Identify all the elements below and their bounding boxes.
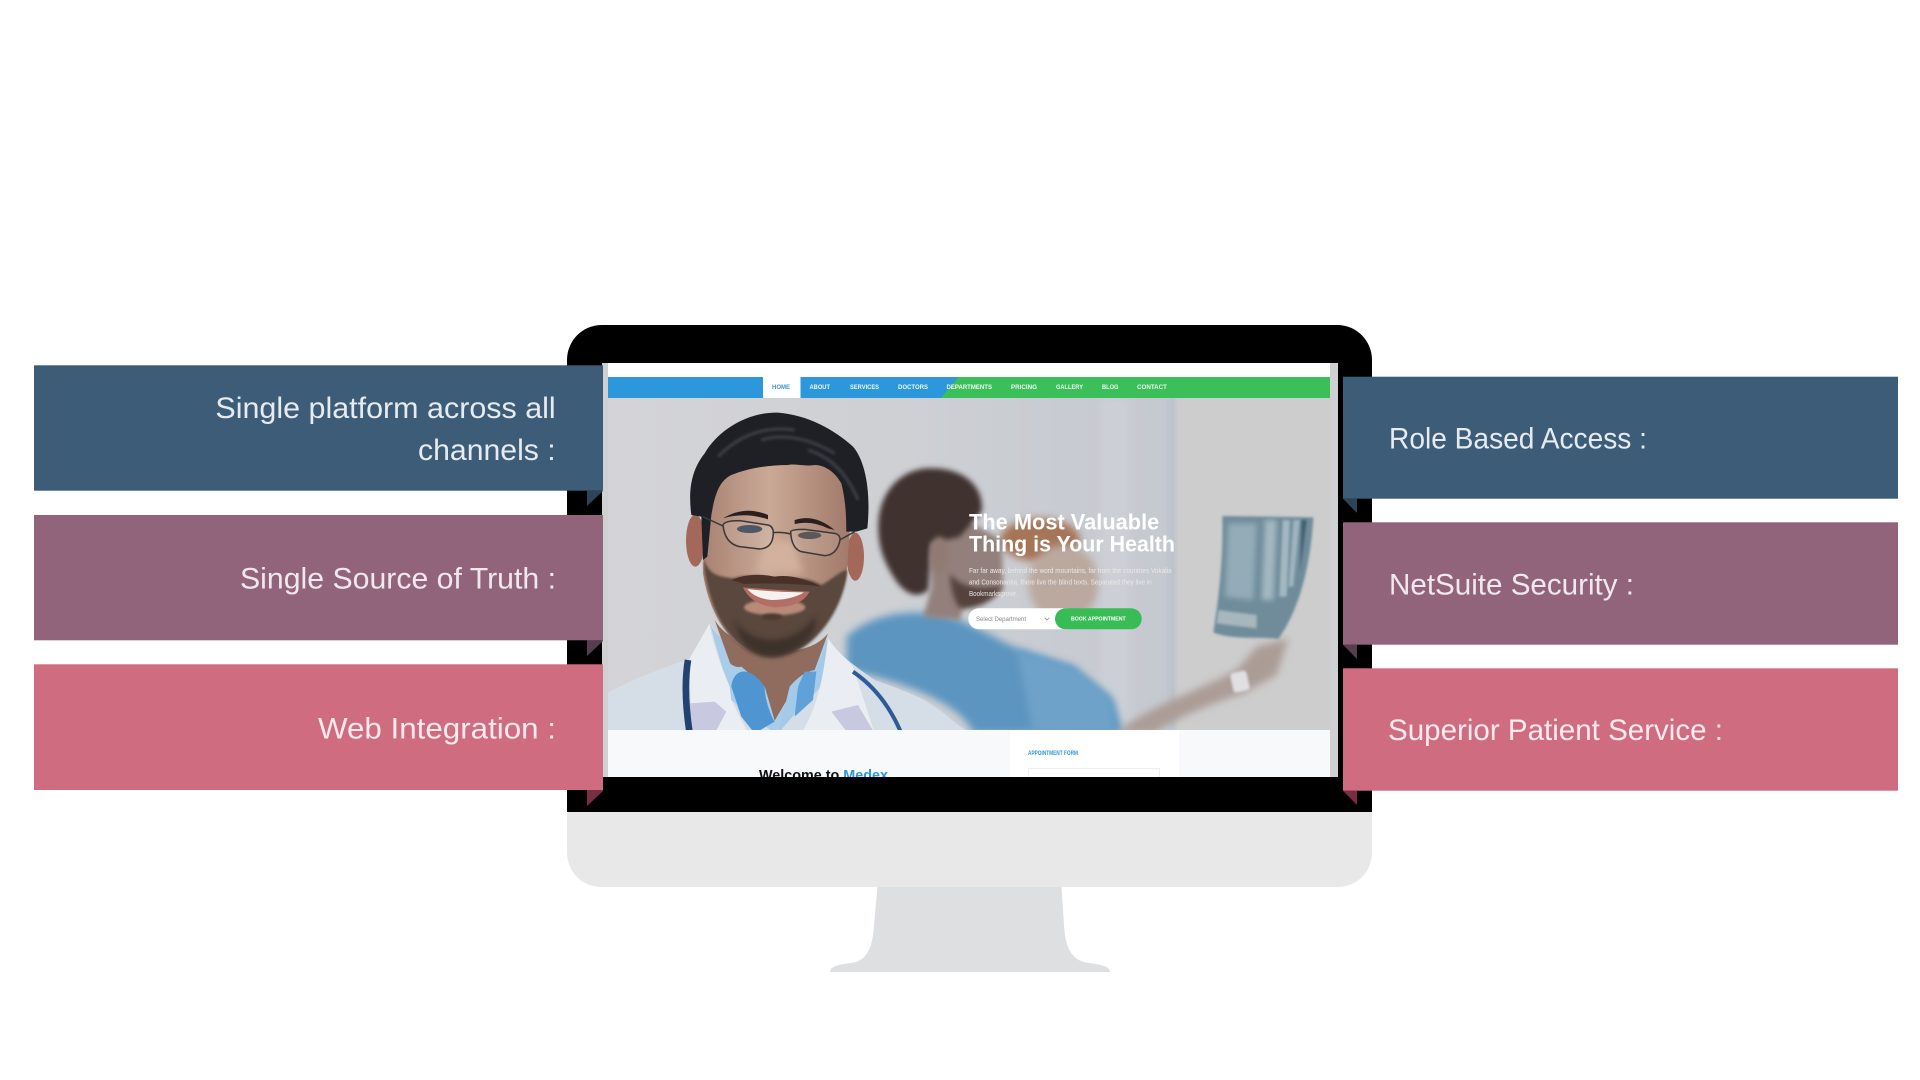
navigation bar: SERVICES [850, 384, 879, 391]
doctor [601, 413, 975, 733]
monitor screen: website [601, 363, 1338, 784]
coat [601, 623, 975, 733]
lower lip area [744, 599, 805, 615]
navigation bar: DEPARTMENTS [946, 384, 992, 391]
hero photo [601, 398, 1330, 733]
hair [690, 413, 868, 560]
hero paragraph: and Consonantia, there live the blind texts. Separated they live in [969, 578, 1152, 587]
hero heading: The Most Valuable [969, 509, 1159, 534]
glasses [703, 517, 855, 556]
hero paragraph: Far far away, behind the word mountains, far from the countries Vokalia [969, 566, 1172, 575]
ribbon: single platform across all channels: channels : [418, 434, 556, 467]
shirt [710, 623, 828, 733]
second person's neck and face [923, 517, 1003, 620]
x-ray film [1213, 516, 1313, 639]
nose [756, 540, 803, 573]
navigation bar: DOCTORS [898, 384, 928, 391]
ribbon: superior patient service: Superior Patient Service : [1388, 714, 1723, 747]
navigation bar [608, 377, 1330, 398]
lower website section [608, 730, 1330, 777]
ribbon: role based access [1343, 377, 1898, 513]
navigation bar: HOME [772, 384, 790, 391]
navigation bar: PRICING [1011, 384, 1037, 391]
mouth [743, 587, 810, 607]
arm [1117, 638, 1288, 733]
appointment form card: APPOINTMENT FORM [1028, 750, 1078, 757]
ribbon: netsuite security [1343, 522, 1898, 659]
ribbon: web integration [34, 664, 603, 806]
mustache [731, 575, 821, 587]
navigation bar: BLOG [1102, 384, 1119, 391]
monitor chin [567, 812, 1372, 887]
stethoscope [686, 660, 690, 733]
book appointment button: BOOK APPOINTMENT [1071, 617, 1126, 623]
department select [968, 608, 1078, 629]
second person's body [847, 613, 1123, 733]
monitor bezel [567, 325, 1372, 812]
department select: Select Department [976, 616, 1026, 623]
shirt collar [730, 664, 774, 730]
second person's hair [878, 468, 982, 595]
beard [703, 557, 847, 657]
ribbon: single platform across all channels [34, 365, 603, 506]
ribbon: netsuite security: NetSuite Security : [1389, 568, 1634, 601]
ribbon: single platform across all channels: Single platform across all [215, 392, 556, 425]
eyebrows [723, 511, 768, 519]
face [703, 457, 850, 657]
book appointment button [1055, 608, 1142, 629]
welcome heading: Welcome to Medex [759, 767, 889, 784]
ribbon: role based access: Role Based Access : [1389, 422, 1647, 455]
navigation bar: GALLERY [1056, 384, 1084, 391]
navigation bar: ABOUT [810, 384, 830, 391]
eyes [737, 525, 762, 533]
ribbon: single source of truth: Single Source of Truth : [240, 562, 556, 595]
coat lapels [690, 623, 748, 733]
ribbon: web integration: Web Integration : [318, 712, 556, 745]
ears [686, 515, 705, 567]
hero paragraph [969, 566, 1172, 598]
ribbon: superior patient service [1343, 668, 1898, 805]
background staff [847, 468, 1313, 733]
monitor stand [830, 887, 1110, 972]
appointment form card [1028, 750, 1160, 777]
ribbon: single source of truth [34, 515, 603, 656]
neck [715, 620, 828, 721]
navigation bar: CONTACT [1137, 384, 1167, 391]
hero heading: Thing is Your Health [969, 532, 1175, 557]
hero paragraph: Bookmarksgrove. [969, 589, 1018, 598]
hero heading [969, 514, 1174, 556]
site header strip [608, 363, 1330, 377]
third person's head [1000, 518, 1080, 562]
